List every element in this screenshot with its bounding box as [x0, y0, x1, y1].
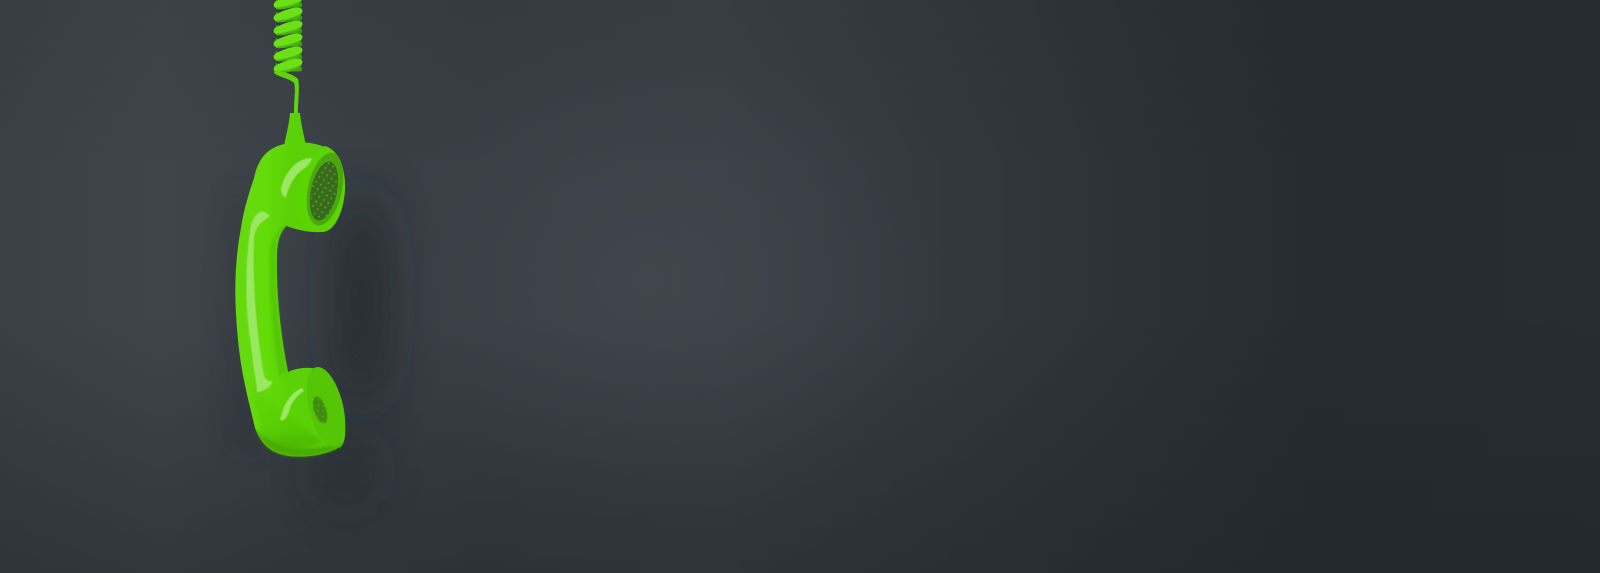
cord tail	[274, 70, 299, 113]
earpiece cup	[281, 146, 349, 232]
handle inner shading	[270, 226, 287, 376]
handle highlight	[246, 212, 272, 392]
handle and earpiece body	[235, 142, 345, 457]
handset	[235, 0, 352, 457]
cast shadow of handset	[224, 190, 388, 506]
mouthpiece cup	[280, 363, 352, 451]
lower shading	[255, 428, 343, 457]
strain relief cone	[284, 113, 306, 146]
coiled cord	[274, 0, 302, 113]
